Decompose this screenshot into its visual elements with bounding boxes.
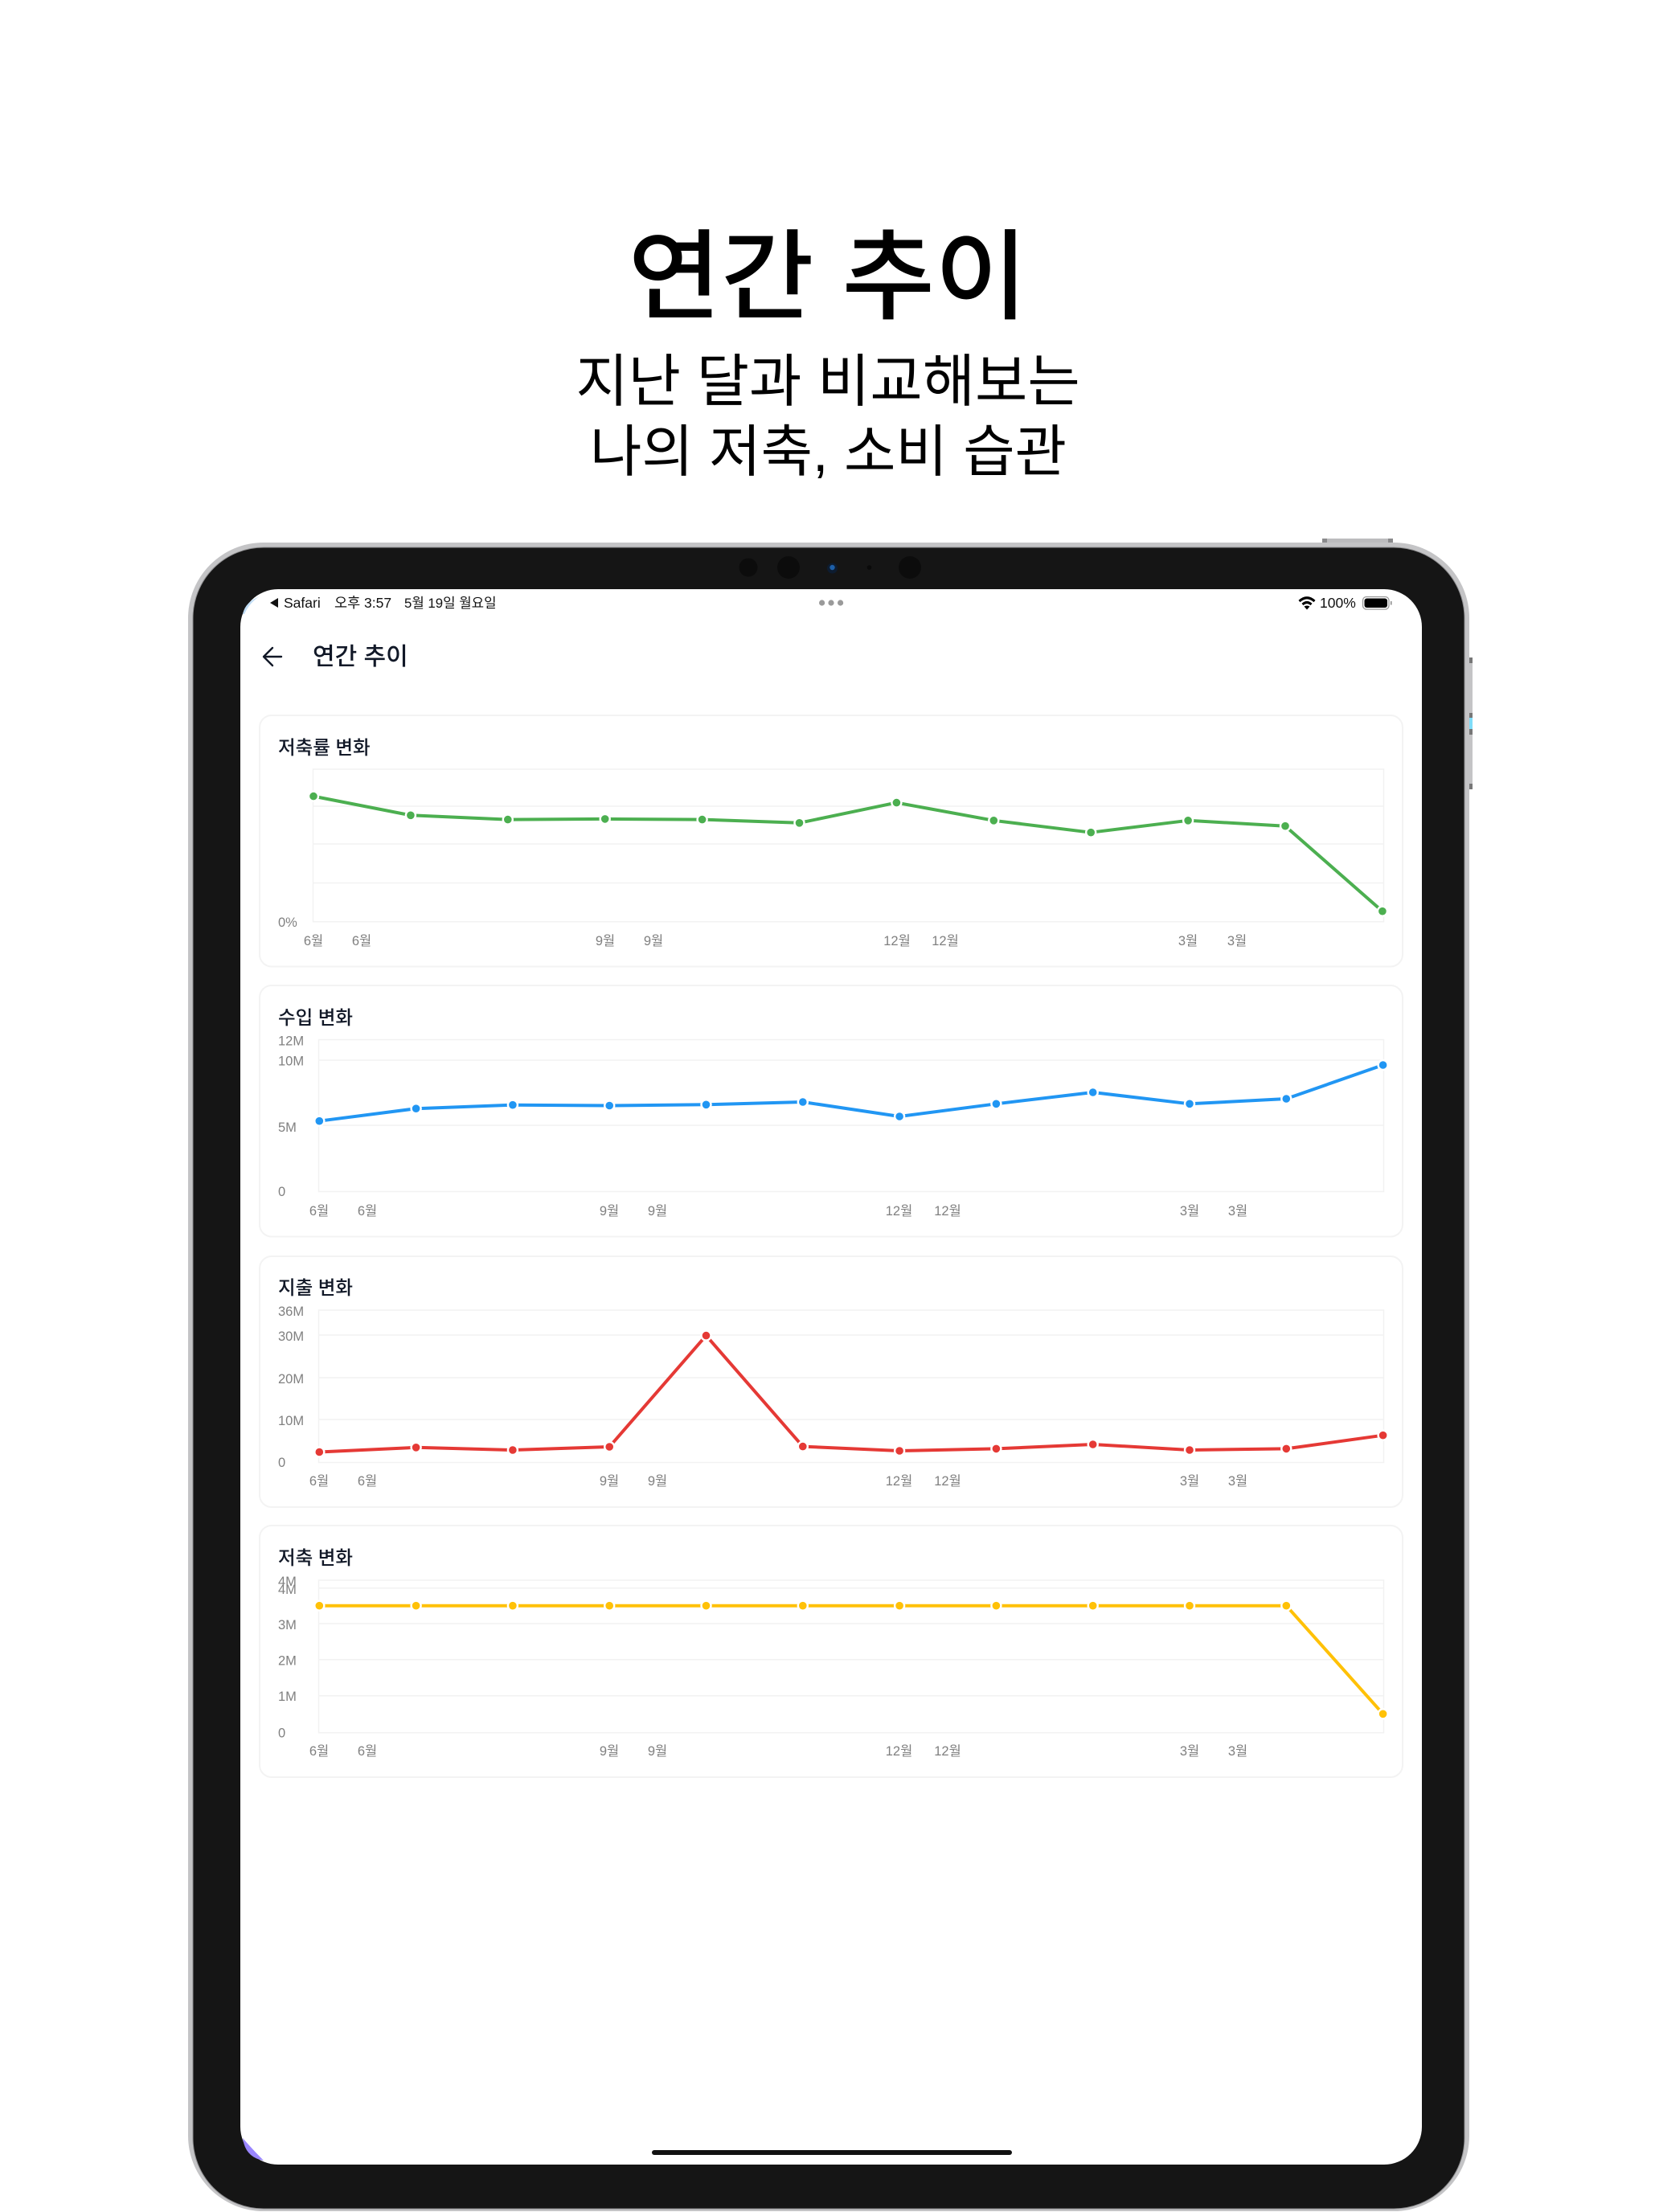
x axis labels: 6월 (358, 1473, 377, 1489)
x axis labels: 9월 (648, 1203, 667, 1219)
status bar right (1299, 595, 1392, 611)
y axis labels: 30M (278, 1329, 304, 1344)
home indicator (652, 2150, 1012, 2155)
x axis labels: 12월 (934, 1473, 961, 1489)
data points (309, 792, 1387, 916)
panel: expense change (260, 1256, 1403, 1507)
data points (314, 1060, 1388, 1126)
wallpaper sliver: top left (243, 596, 260, 614)
front camera array (739, 556, 921, 579)
tablet device (188, 539, 1473, 2211)
device black bezel (193, 547, 1464, 2209)
x axis labels: 3월 (1178, 933, 1198, 948)
y axis labels (278, 1575, 297, 1741)
panel heading: 저축률 변화 (278, 737, 371, 758)
panel: savings rate change (260, 715, 1403, 966)
x axis labels (309, 1473, 1247, 1489)
x axis labels: 12월 (883, 933, 911, 948)
x axis labels: 6월 (352, 933, 371, 948)
x axis labels: 3월 (1180, 1203, 1199, 1219)
x axis labels: 9월 (600, 1743, 619, 1759)
panel heading: 저축 변화 (278, 1547, 353, 1568)
x axis labels: 3월 (1180, 1743, 1199, 1759)
x axis labels: 6월 (358, 1203, 377, 1219)
y axis labels: 20M (278, 1372, 304, 1387)
x axis labels: 12월 (886, 1203, 912, 1219)
x axis labels: 9월 (600, 1473, 619, 1489)
x axis labels: 6월 (309, 1473, 329, 1489)
x axis labels: 12월 (934, 1203, 961, 1219)
y axis labels: 4M (278, 1583, 297, 1597)
line chart: expense (278, 1305, 1388, 1489)
icon: back arrow (264, 648, 281, 666)
y axis labels: 0 (278, 1456, 285, 1470)
x axis labels (309, 1203, 1247, 1219)
subtitle (576, 350, 1080, 483)
multitasking dots (819, 600, 843, 606)
x axis labels: 12월 (934, 1743, 961, 1759)
wallpaper sliver: bottom left (243, 2138, 264, 2161)
x axis labels: 12월 (886, 1743, 912, 1759)
x axis labels: 3월 (1228, 1743, 1247, 1759)
y axis labels (278, 1034, 304, 1199)
y axis labels: 12M (278, 1034, 304, 1048)
line chart: savings (278, 1575, 1388, 1759)
status bar left: 5월 19일 월요일 (404, 596, 497, 611)
subtitle: 지난 달과 비교해보는 (576, 350, 1080, 414)
x axis labels: 9월 (648, 1473, 667, 1489)
x axis labels: 12월 (886, 1473, 912, 1489)
x axis labels: 3월 (1227, 933, 1247, 948)
x axis labels: 6월 (309, 1203, 329, 1219)
icon: battery (1363, 596, 1392, 609)
y axis label: 0% (278, 916, 297, 930)
x axis labels: 6월 (358, 1743, 377, 1759)
y axis labels: 3M (278, 1618, 297, 1632)
line chart: savings rate (278, 769, 1387, 948)
y axis labels (278, 1305, 304, 1470)
top power button (1322, 539, 1393, 545)
data line (319, 1065, 1383, 1121)
panel heading: 수입 변화 (278, 1007, 353, 1028)
icon: wifi (1299, 598, 1315, 609)
y axis labels: 10M (278, 1055, 304, 1069)
status bar left (270, 595, 497, 611)
x axis labels (304, 933, 1247, 948)
data line (319, 1336, 1383, 1452)
battery percent: 100% (1320, 595, 1356, 611)
x axis labels: 3월 (1180, 1473, 1199, 1489)
line chart: income (278, 1034, 1388, 1219)
y axis labels: 4M (278, 1575, 297, 1589)
status bar left: Safari (284, 595, 321, 611)
panel heading: 지출 변화 (278, 1277, 353, 1298)
x axis labels: 9월 (600, 1203, 619, 1219)
x axis labels (309, 1743, 1247, 1759)
x axis labels: 3월 (1228, 1203, 1247, 1219)
icon: back triangle (270, 598, 278, 608)
panel: savings change (260, 1526, 1403, 1777)
x axis labels: 6월 (304, 933, 323, 948)
x axis labels: 6월 (309, 1743, 329, 1759)
subtitle: 나의 저축, 소비 습관 (590, 420, 1067, 483)
y axis labels: 5M (278, 1120, 297, 1135)
panel: income change (260, 985, 1403, 1236)
data line (319, 1606, 1383, 1714)
x axis labels: 9월 (648, 1743, 667, 1759)
data points (314, 1601, 1388, 1718)
x axis labels: 12월 (932, 933, 959, 948)
y axis labels: 36M (278, 1305, 304, 1319)
data points (314, 1331, 1388, 1456)
device silver frame (188, 543, 1469, 2211)
x axis labels: 9월 (596, 933, 615, 948)
status bar left: 오후 3:57 (334, 595, 391, 611)
side volume buttons (1468, 657, 1473, 789)
x axis labels: 3월 (1228, 1473, 1247, 1489)
y axis labels: 1M (278, 1690, 297, 1704)
page heading: 연간 추이 (313, 644, 408, 670)
title: 연간 추이 (628, 223, 1028, 333)
y axis labels: 2M (278, 1654, 297, 1669)
data line (313, 797, 1382, 911)
y axis labels: 0 (278, 1727, 285, 1741)
screen (240, 589, 1422, 2165)
y axis labels: 10M (278, 1414, 304, 1428)
y axis labels: 0 (278, 1185, 285, 1199)
x axis labels: 9월 (644, 933, 663, 948)
